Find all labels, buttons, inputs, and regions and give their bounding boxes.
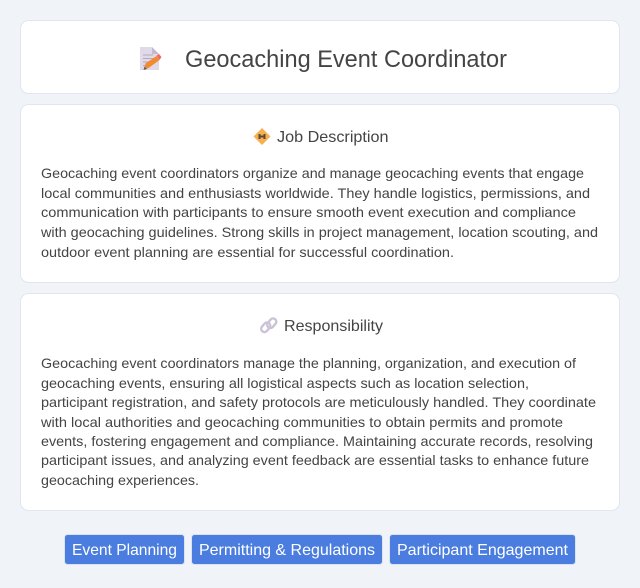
text block: job description bbox=[40, 165, 598, 260]
text block: responsibility: Geocaching event coordinators manage the planning, organization, and execution of bbox=[41, 355, 576, 371]
text block: job description: outdoor event planning are essential for successful coordination. bbox=[41, 244, 454, 260]
icon: document with pencil bbox=[140, 47, 162, 70]
tag: permitting and regulations: Permitting & Regulations bbox=[199, 542, 375, 559]
tag: permitting and regulations bbox=[192, 534, 382, 564]
text block: job description: with geocaching guidelines. Strong skills in project management, location scouting, and bbox=[40, 224, 598, 240]
text block: job description: communication with participants to ensure smooth event execution and compliance bbox=[41, 204, 576, 220]
text block: responsibility: events, fostering engagement and compliance. Maintaining accurate records, resolving bbox=[41, 433, 593, 449]
text block: responsibility bbox=[40, 355, 596, 488]
text block: job description: Geocaching event coordinators organize and manage geocaching events that engage bbox=[41, 165, 584, 181]
tag: event planning: Event Planning bbox=[72, 542, 177, 559]
icon: chain link bbox=[260, 317, 278, 333]
heading: responsibility: Responsibility bbox=[284, 318, 383, 335]
tag: event planning bbox=[64, 534, 184, 564]
icon: geocache diamond bbox=[254, 128, 270, 145]
panel: responsibility bbox=[20, 294, 620, 510]
heading: job description: Job Description bbox=[277, 129, 388, 146]
text block: responsibility: participant registration, and safety protocols are meticulously handled. They coordinate bbox=[41, 394, 596, 410]
title: Geocaching Event Coordinator bbox=[185, 46, 507, 73]
tag: participant engagement: Participant Engagement bbox=[397, 542, 569, 559]
text block: responsibility: participant issues, and analyzing event feedback are essential tasks to enhance future bbox=[41, 452, 589, 468]
panel: job description bbox=[20, 104, 620, 282]
tag: participant engagement bbox=[390, 534, 576, 564]
text block: responsibility: geocaching events, ensuring all logistical aspects such as location selection, bbox=[41, 375, 529, 391]
text block: job description: local communities and enthusiasts worldwide. They handle logistics, permissions, and bbox=[41, 185, 590, 201]
text block: responsibility: with local authorities and geocaching communities to obtain permits and promote bbox=[40, 414, 563, 430]
header panel bbox=[20, 20, 620, 94]
text block: responsibility: geocaching experiences. bbox=[41, 472, 199, 488]
